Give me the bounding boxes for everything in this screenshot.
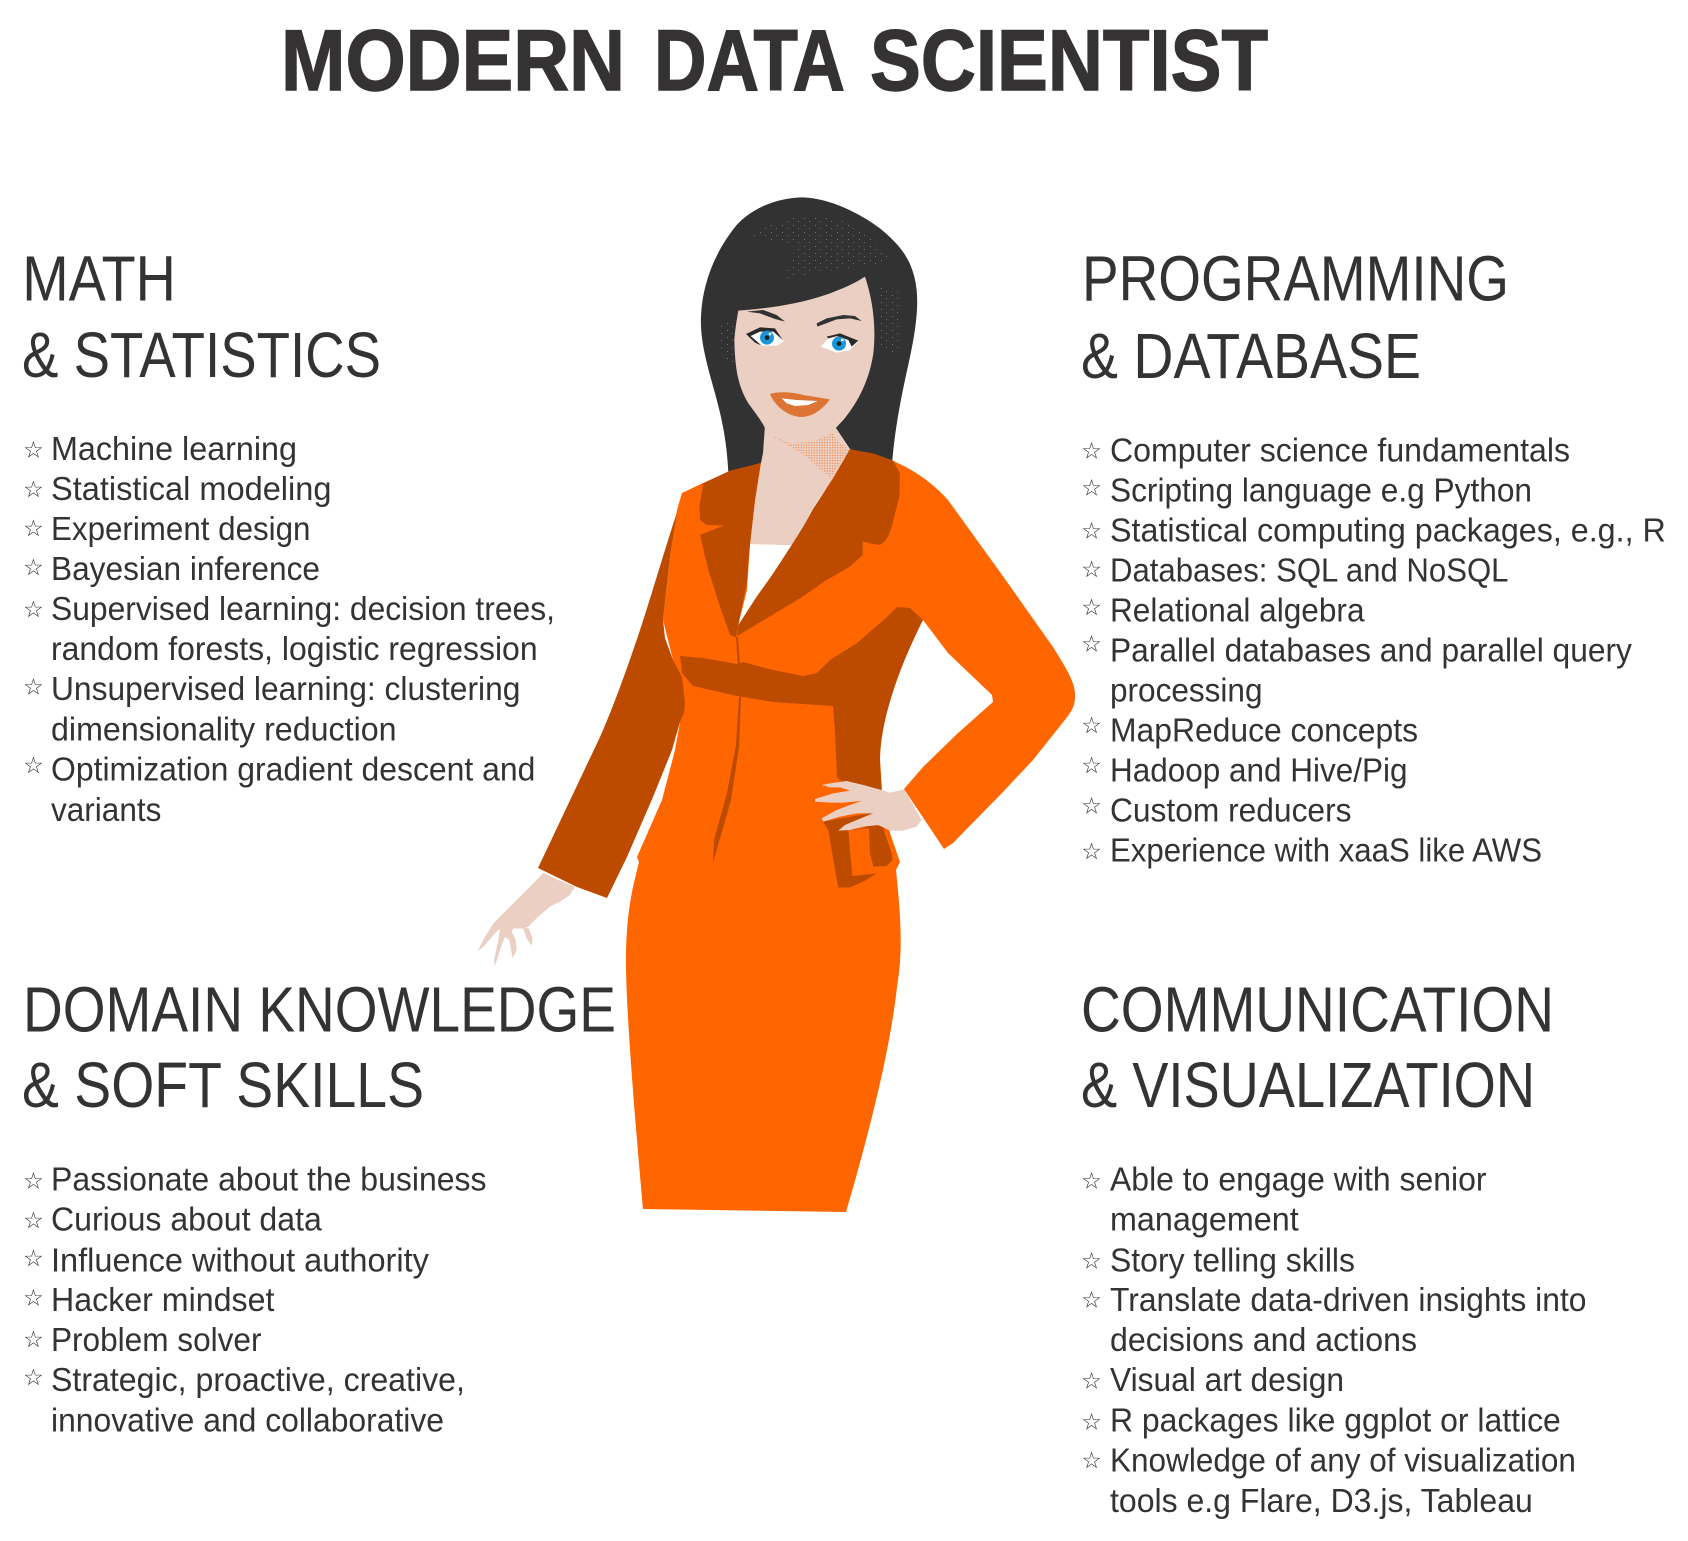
list: math skills: random forests, logistic regression bbox=[51, 631, 538, 668]
list: communication skills: Story telling skills bbox=[1110, 1242, 1355, 1280]
list: communication skills: Visual art design bbox=[1110, 1362, 1344, 1399]
list: programming skills: Custom reducers bbox=[1110, 792, 1352, 830]
list: communication skills: R packages like ggplot or lattice bbox=[1110, 1402, 1561, 1440]
list: programming skills: Hadoop and Hive/Pig bbox=[1110, 752, 1408, 790]
list: communication skills: Able to engage with senior bbox=[1110, 1161, 1486, 1198]
list: communication skills: ☆ bbox=[1081, 1168, 1102, 1194]
neck shadow bbox=[770, 433, 849, 478]
list: math skills: Machine learning bbox=[51, 431, 297, 468]
heading: math and statistics: & STATISTICS bbox=[22, 319, 381, 391]
jacket and skirt bbox=[626, 449, 1075, 1212]
white blouse bbox=[738, 544, 792, 626]
list: programming skills: ☆ bbox=[1081, 753, 1102, 779]
left eye bbox=[746, 327, 784, 346]
list: communication skills bbox=[1081, 1161, 1586, 1520]
list: programming skills: Scripting language e.g Python bbox=[1110, 472, 1532, 510]
list: programming skills: ☆ bbox=[1081, 557, 1102, 583]
list: programming skills: Parallel databases and parallel query bbox=[1110, 632, 1632, 670]
list: domain skills: ☆ bbox=[23, 1286, 44, 1312]
panel: communication and visualization bbox=[1081, 974, 1586, 1520]
hair bbox=[701, 197, 917, 472]
title: SCIENTIST bbox=[870, 13, 1268, 109]
list: math skills: Statistical modeling bbox=[51, 471, 332, 508]
list: programming skills: ☆ bbox=[1081, 793, 1102, 819]
heading: programming and database bbox=[1081, 242, 1509, 392]
list: math skills bbox=[23, 431, 555, 829]
list: domain skills: innovative and collaborative bbox=[51, 1402, 444, 1440]
heading: programming and database: PROGRAMMING bbox=[1082, 242, 1509, 314]
list: communication skills: Knowledge of any of visualization bbox=[1110, 1442, 1576, 1480]
list: programming skills: Statistical computing packages, e.g., R bbox=[1110, 512, 1666, 550]
left lapel bbox=[699, 463, 761, 637]
heading: communication and visualization: COMMUNICATION bbox=[1081, 974, 1554, 1046]
pocket bbox=[823, 813, 893, 888]
list: math skills: ☆ bbox=[23, 555, 44, 581]
list: communication skills: decisions and actions bbox=[1110, 1322, 1417, 1359]
list: math skills: ☆ bbox=[23, 477, 44, 503]
list: communication skills: Translate data-driven insights into bbox=[1110, 1282, 1586, 1319]
list: programming skills: ☆ bbox=[1081, 518, 1102, 544]
list: domain skills: ☆ bbox=[23, 1168, 44, 1194]
list: math skills: ☆ bbox=[23, 438, 44, 464]
title bbox=[281, 13, 1268, 109]
list: programming skills: ☆ bbox=[1081, 595, 1102, 621]
list: programming skills: Databases: SQL and NoSQL bbox=[1110, 552, 1508, 590]
heading: math and statistics bbox=[22, 242, 381, 391]
list: math skills: ☆ bbox=[23, 597, 44, 623]
list: math skills: Unsupervised learning: clustering bbox=[51, 671, 520, 708]
list: math skills: Supervised learning: decision trees, bbox=[51, 591, 555, 628]
list: math skills: Optimization gradient descent and bbox=[51, 752, 535, 789]
title: DATA bbox=[654, 13, 845, 109]
figure: woman in orange suit bbox=[477, 197, 1075, 1212]
panel: programming and database bbox=[1081, 242, 1666, 870]
list: math skills: ☆ bbox=[23, 516, 44, 542]
left hand bbox=[477, 873, 575, 966]
list: programming skills: processing bbox=[1110, 672, 1262, 710]
list: programming skills: MapReduce concepts bbox=[1110, 712, 1418, 750]
list: programming skills: ☆ bbox=[1081, 631, 1102, 657]
left sleeve bbox=[538, 512, 685, 898]
list: programming skills: Relational algebra bbox=[1110, 592, 1365, 630]
list: math skills: dimensionality reduction bbox=[51, 712, 397, 748]
right lapel bbox=[737, 449, 900, 636]
list: domain skills: ☆ bbox=[23, 1327, 44, 1353]
list: math skills: Experiment design bbox=[51, 511, 310, 548]
list: programming skills: Experience with xaaS like AWS bbox=[1110, 832, 1542, 870]
list: domain skills: Problem solver bbox=[51, 1322, 262, 1359]
panel: domain knowledge and soft skills bbox=[22, 974, 616, 1440]
list: programming skills: Computer science fundamentals bbox=[1110, 432, 1570, 470]
lips bbox=[770, 392, 830, 417]
list: domain skills bbox=[23, 1161, 487, 1440]
right eyebrow bbox=[817, 315, 862, 327]
heading: math and statistics: MATH bbox=[22, 242, 176, 314]
heading: communication and visualization: & VISUALIZATION bbox=[1081, 1049, 1535, 1121]
left eyebrow bbox=[747, 310, 785, 322]
list: math skills: ☆ bbox=[23, 753, 44, 779]
neck bbox=[750, 425, 850, 545]
jacket fold bbox=[680, 607, 923, 800]
lower seam bbox=[713, 697, 741, 863]
list: domain skills: Strategic, proactive, creative, bbox=[51, 1362, 465, 1399]
heading: domain knowledge and soft skills: DOMAIN KNOWLEDGE bbox=[23, 974, 616, 1046]
list: domain skills: ☆ bbox=[23, 1208, 44, 1234]
list: domain skills: Hacker mindset bbox=[51, 1282, 275, 1319]
right hand bbox=[815, 781, 922, 831]
list: math skills: ☆ bbox=[23, 675, 44, 701]
list: domain skills: ☆ bbox=[23, 1365, 44, 1391]
front seam bbox=[736, 637, 740, 666]
list: programming skills: ☆ bbox=[1081, 713, 1102, 739]
list: communication skills: ☆ bbox=[1081, 1409, 1102, 1435]
list: math skills: Bayesian inference bbox=[51, 551, 320, 588]
list: domain skills: Curious about data bbox=[51, 1202, 322, 1238]
list: programming skills: ☆ bbox=[1081, 476, 1102, 502]
list: math skills: variants bbox=[51, 792, 161, 829]
heading: communication and visualization bbox=[1081, 974, 1554, 1121]
list: programming skills bbox=[1081, 432, 1666, 870]
heading: domain knowledge and soft skills bbox=[22, 974, 616, 1121]
heading: programming and database: & DATABASE bbox=[1081, 320, 1421, 392]
list: communication skills: ☆ bbox=[1081, 1369, 1102, 1395]
list: communication skills: management bbox=[1110, 1202, 1299, 1238]
list: communication skills: ☆ bbox=[1081, 1448, 1102, 1474]
right eye bbox=[821, 333, 858, 353]
heading: domain knowledge and soft skills: & SOFT SKILLS bbox=[22, 1049, 424, 1121]
face bbox=[734, 277, 874, 441]
list: communication skills: tools e.g Flare, D3.js, Tableau bbox=[1110, 1483, 1533, 1520]
list: domain skills: Passionate about the business bbox=[51, 1161, 486, 1198]
list: communication skills: ☆ bbox=[1081, 1288, 1102, 1314]
list: programming skills: ☆ bbox=[1081, 438, 1102, 464]
list: programming skills: ☆ bbox=[1081, 839, 1102, 865]
list: communication skills: ☆ bbox=[1081, 1249, 1102, 1275]
list: domain skills: Influence without authority bbox=[51, 1242, 429, 1280]
panel: math and statistics bbox=[22, 242, 555, 829]
title: MODERN bbox=[281, 13, 625, 109]
list: domain skills: ☆ bbox=[23, 1246, 44, 1272]
